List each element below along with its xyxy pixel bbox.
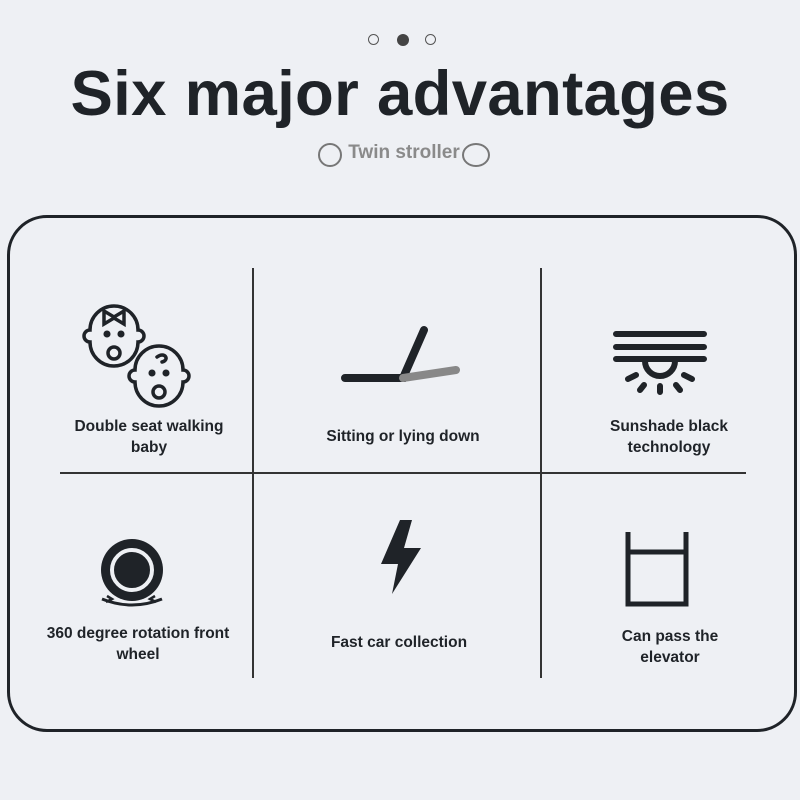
icon: wheel: [101, 539, 163, 606]
icon: twin babies: [82, 304, 191, 408]
label: wheel: 360 degree rotation front wheel: [47, 625, 229, 663]
icon: sunshade: [613, 331, 707, 395]
pagination dots: [368, 34, 436, 46]
subtitle: Twin stroller: [348, 142, 460, 163]
label: fast fold: Fast car collection: [331, 634, 467, 651]
label: sitting: Sitting or lying down: [326, 428, 480, 445]
label: sunshade: Sunshade black technology: [610, 418, 728, 456]
subtitle: [318, 142, 490, 167]
title: Six major advantages: [71, 59, 729, 129]
panel: advantages card: [7, 215, 797, 732]
icon: elevator: [626, 532, 688, 606]
label: double seat: Double seat walking baby: [74, 418, 224, 456]
label: elevator: Can pass the elevator: [622, 628, 718, 666]
icon: lightning: [381, 520, 421, 594]
icon: recline: [341, 326, 460, 382]
